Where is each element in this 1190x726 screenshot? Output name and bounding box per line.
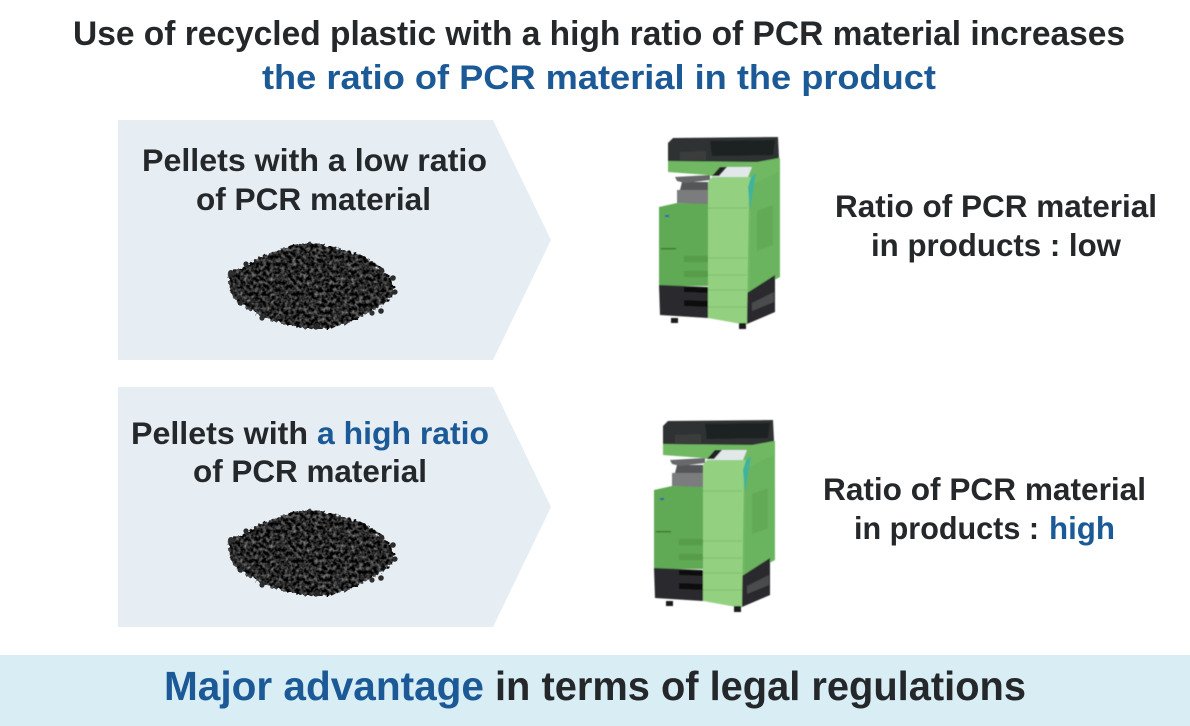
icon: pile of black pellets [228,243,398,329]
banner: major advantage [0,655,1190,726]
heading: high ratio pellets: Pellets with [131,415,308,451]
heading: low ratio pellets: of PCR material [196,181,431,217]
heading: high ratio pellets [131,415,489,489]
banner: major advantage: in terms of legal regulations [495,663,1026,709]
heading: high ratio pellets: a high ratio [317,415,489,451]
text: ratio in products high [823,471,1146,546]
icon: pile of black pellets [228,510,398,596]
heading: low ratio pellets [142,142,487,217]
text: ratio in products high: high [1049,510,1115,546]
text: ratio in products low: in products : low [871,227,1121,263]
heading: low ratio pellets: Pellets with a low ratio [142,142,487,178]
text: ratio in products high: in products : [854,510,1039,546]
panel: low ratio pellets [118,120,551,360]
text: ratio in products low: Ratio of PCR material [835,188,1157,224]
heading: high ratio pellets: of PCR material [193,453,427,489]
icon: green printer, high ratio [654,420,775,612]
panel: high ratio pellets [118,387,551,627]
banner: major advantage: Major advantage [164,663,484,709]
title [73,15,1125,97]
text: ratio in products low [835,188,1157,263]
text: ratio in products high: Ratio of PCR material [823,471,1146,507]
icon: green printer, low ratio [659,137,780,329]
title: Use of recycled plastic with a high ratio of PCR material increases [73,15,1125,53]
title: the ratio of PCR material in the product [262,59,936,97]
